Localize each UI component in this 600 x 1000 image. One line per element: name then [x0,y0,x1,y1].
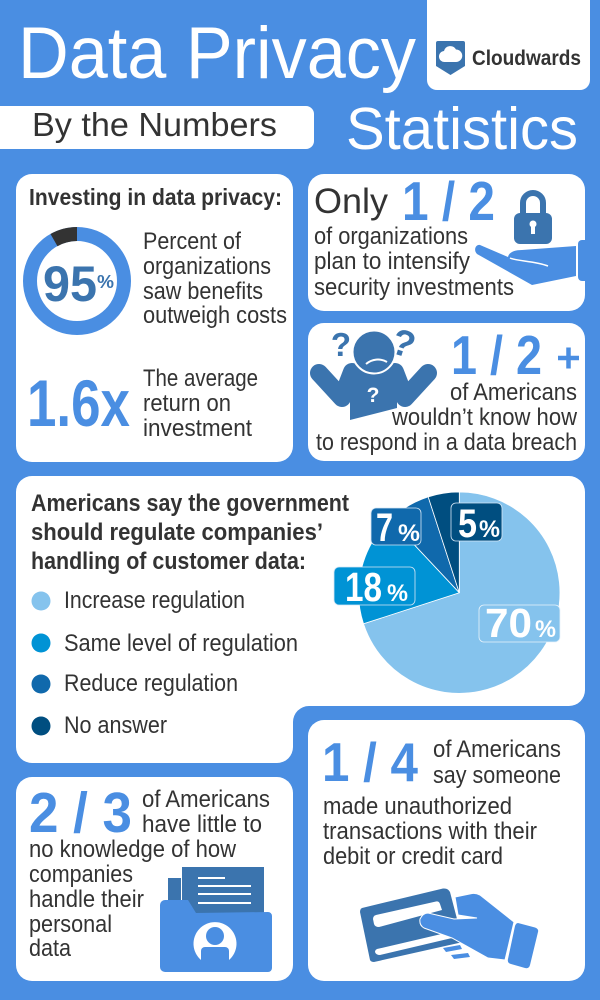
text: wouldn't know how to respond: wouldn’t know how [391,404,578,431]
legend: Increase regulation [64,587,245,614]
stat: 1 / 4: 1 / 4 [322,731,418,793]
panel: security investments [308,170,590,311]
text: little knowledge: no knowledge of how [29,836,237,863]
donut chart: 95%: 95 [43,256,97,312]
title: Data Privacy: Data Privacy [18,13,416,94]
legend: Reduce regulation [64,670,238,697]
legend: Same level of regulation [64,630,298,657]
stat: 1.6x: 1.6x [27,366,130,440]
label: 18%: % [387,580,408,607]
subtitle: By the Numbers: By the Numbers [32,106,277,143]
label: 7%: % [398,520,420,547]
heading: regulation: Americans say the government [31,490,349,517]
text: little knowledge: have little to [142,811,262,838]
icon: open hand [475,240,590,285]
logo: Cloudwards [427,0,590,90]
text: little knowledge: personal [29,911,112,938]
text: unauthorized transactions: transactions with their [323,818,537,845]
stat: 2 / 3: 2 / 3 [29,781,132,845]
label: 5%: 5 [458,502,477,546]
text: little knowledge: companies [29,861,133,888]
text: of organizations [314,223,514,301]
icon: padlock [514,193,552,244]
icon: hand holding credit card [360,888,538,968]
text: wouldn't know how to respond [316,379,578,456]
text: wouldn't know how to respond: of Americans [450,379,577,406]
text: percent of organizations [143,228,287,329]
text: unauthorized transactions: debit or credit card [323,843,503,870]
text: Only: Only [314,182,389,221]
text: unauthorized transactions: of Americans [433,736,561,763]
text: little knowledge [29,786,270,962]
text: wouldn't know how to respond: to respond in a data breach [316,429,577,456]
label: 5%: % [479,516,500,543]
text: unauthorized transactions: made unauthorized [323,793,512,820]
icon: confused person: ? [367,384,379,407]
text: of organizations: security investments [314,274,514,301]
stat: 1 / 2: 1 / 2 [402,170,495,232]
heading: regulation [31,490,349,575]
label: 7% [371,506,421,550]
title: Statistics: Statistics [346,96,578,162]
label: 18% [334,564,415,610]
panel: data breach [308,320,585,461]
label: 18%: 18 [345,564,382,610]
text: of organizations: plan to intensify [314,248,470,275]
text: unauthorized transactions: say someone [433,762,561,789]
panel: government regulation [16,476,585,763]
panel: knowledge of data handling [16,777,293,981]
panel: unauthorized transactions [308,720,585,981]
heading: investing: Investing in data privacy: [29,184,282,210]
heading: regulation: handling of customer data: [31,548,306,575]
text: little knowledge: data [29,935,72,962]
text: little knowledge: handle their [29,886,144,913]
text: percent of organizations: Percent of [143,228,241,255]
text: percent of organizations: saw benefits [143,278,263,305]
pie chart [334,492,560,693]
logo: Cloudwards: Cloudwards [472,47,581,70]
icon: confused person: ? [386,320,421,366]
text: of organizations: of organizations [314,223,468,250]
stat: 1 / 2 +: 1 / 2 [451,324,542,386]
subtitle: By the Numbers [0,106,314,149]
text: average return: The average [143,365,258,392]
text: percent of organizations: outweigh costs [143,302,287,329]
text: average return [143,365,258,442]
text: unauthorized transactions [323,736,561,870]
legend: No answer [64,712,167,739]
text: average return: return on [143,390,231,417]
label: 70%: % [535,616,556,643]
panel: investing in data privacy [16,174,293,462]
text: little knowledge: of Americans [142,786,270,813]
text: percent of organizations: organizations [143,253,271,280]
icon: personal data folder [160,867,272,972]
icon: confused person: ? [331,326,351,363]
donut chart: 95% [30,227,124,328]
heading: regulation: should regulate companies’ [31,519,323,546]
label: 70% [479,600,560,646]
donut chart: 95%: % [97,272,114,292]
label: 7%: 7 [376,506,393,550]
text: average return: investment [143,415,252,442]
legend [32,587,298,739]
label: 5% [451,502,502,546]
label: 70%: 70 [485,600,532,646]
icon: confused person [319,320,428,420]
